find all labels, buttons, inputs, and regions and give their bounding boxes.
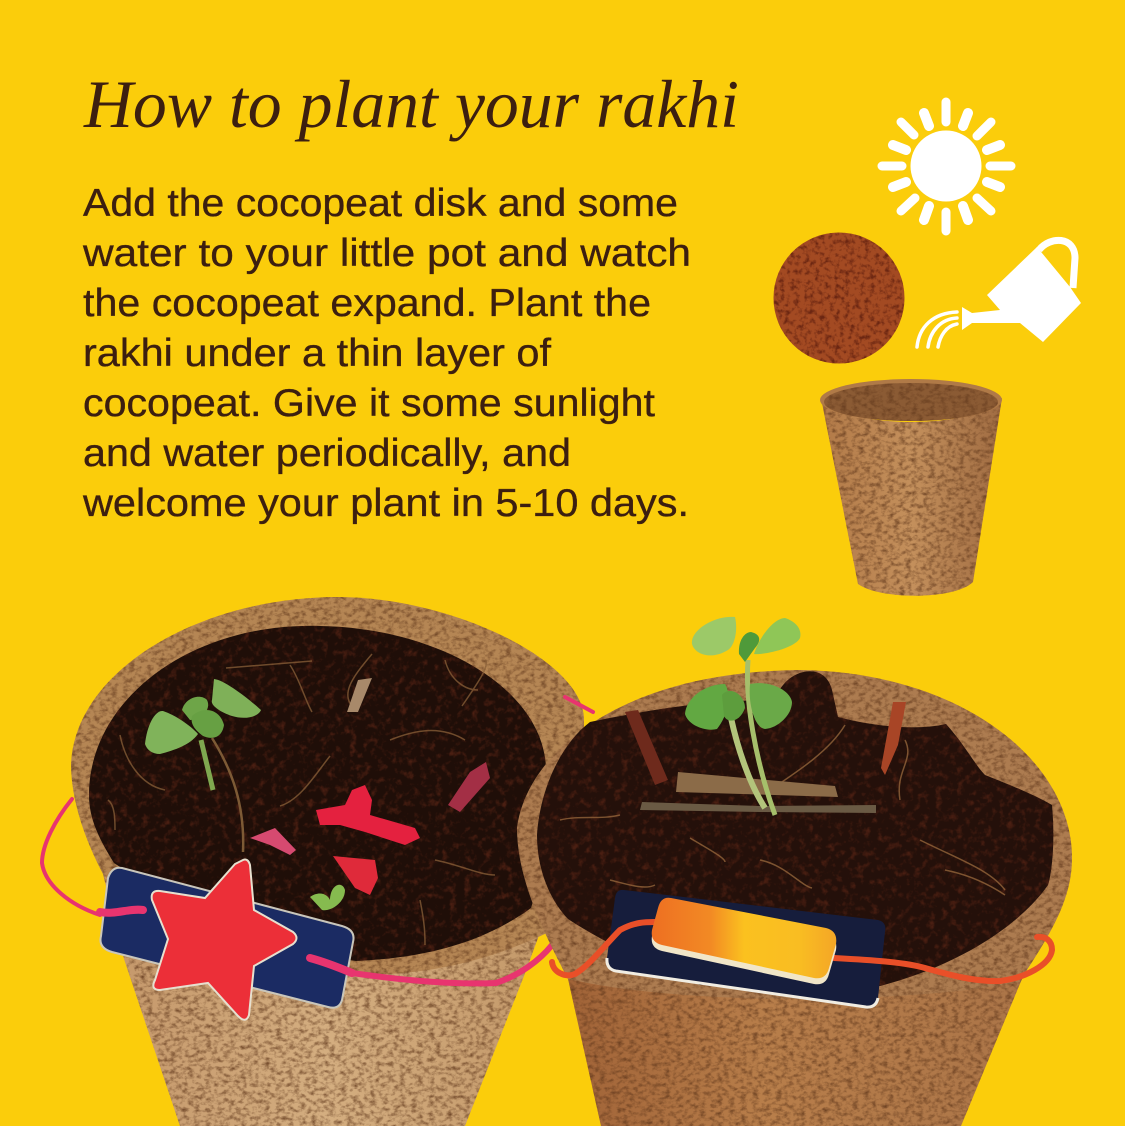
left rakhi string [42,697,593,983]
instructions text block: cocopeat. Give it some sunlight [83,382,655,425]
left pot body [103,874,552,1126]
icon: watering can [917,240,1081,347]
instructions text block: rakhi under a thin layer of [83,332,551,375]
right rakhi string [552,922,1052,981]
right buried rakhi strip [640,772,876,813]
right red twine stubs [625,702,906,785]
instructions text block: welcome your plant in 5-10 days. [82,482,689,525]
right navy rakhi band [607,890,885,1007]
right pot rim [517,670,1072,999]
right orange rakhi tag [652,898,836,978]
right planted pot [517,617,1072,1126]
left pot rim [71,597,584,975]
right band white edge [607,958,878,1007]
small coir pot [820,379,1002,596]
instructions text block: water to your little pot and watch [82,232,691,275]
instructions text block: the cocopeat expand. Plant the [83,282,651,325]
left soil [89,626,546,961]
left planted pot [42,597,593,1126]
icon: cocopeat disk [774,232,904,364]
icon: sun [882,102,1011,231]
instructions text block: and water periodically, and [83,432,571,475]
instructions text block: Add the cocopeat disk and some [83,182,678,225]
right seedling [685,617,800,815]
right soil fibres [560,725,1005,895]
right tag base [652,904,836,984]
left stick in soil [347,678,372,712]
title: How to plant your rakhi [83,66,739,142]
left pink rakhi fragments [250,762,490,895]
right pot body [532,892,1048,1126]
left star [152,860,296,1020]
instructions text block [82,182,691,525]
left navy rakhi band [100,868,354,1008]
right soil [537,671,1053,986]
left soil fibres [108,654,495,945]
left sprout [145,679,345,910]
